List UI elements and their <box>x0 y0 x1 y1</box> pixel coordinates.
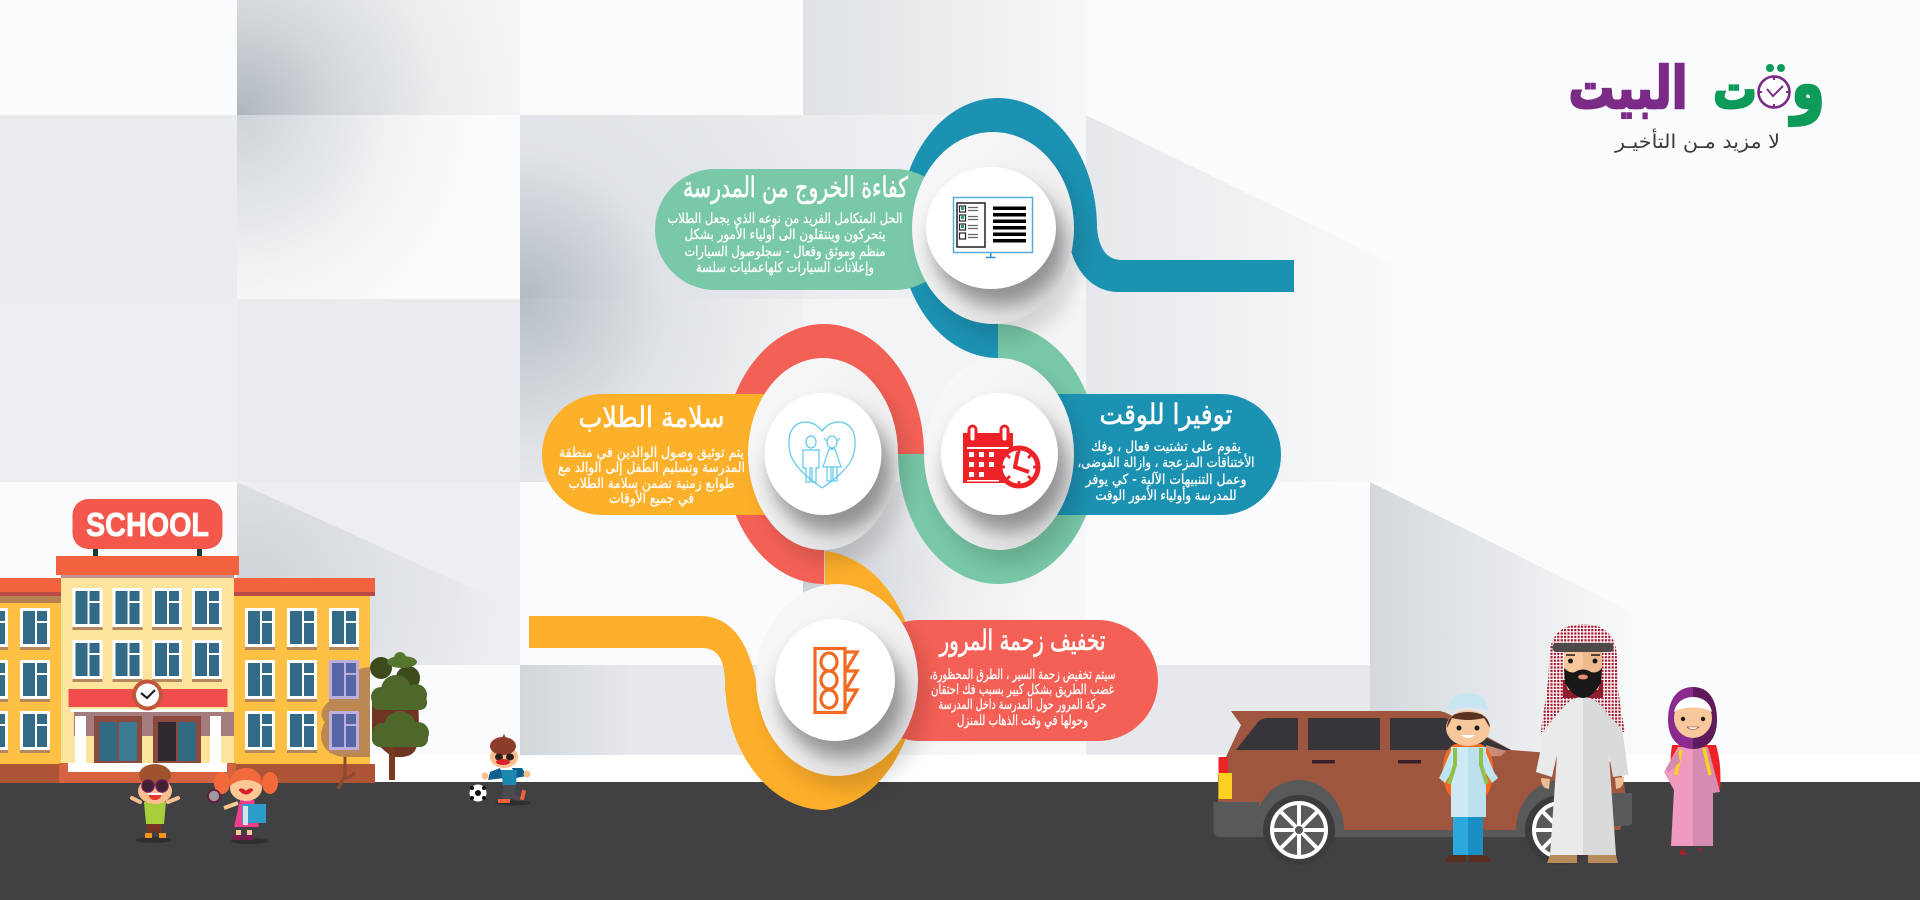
character: boy with ball <box>470 734 531 806</box>
disc: exit efficiency <box>912 132 1084 338</box>
school building <box>0 499 375 789</box>
character: boy with cap <box>1439 693 1498 862</box>
text block: وحولها في وقت الذهاب للمنزل <box>957 713 1088 729</box>
panel: exit efficiency <box>655 169 955 290</box>
heading: سلامة الطلاب <box>578 401 724 434</box>
text block: المدرسة وتسليم الطفل إلى الوالد مع <box>558 460 745 476</box>
disc: traffic reduction <box>756 584 928 790</box>
logo <box>1568 41 1825 153</box>
text block <box>668 211 902 276</box>
car trim <box>1214 780 1632 837</box>
character: girl in hijab <box>1664 687 1720 855</box>
character: man in thobe and ghutra <box>1536 624 1628 863</box>
text block: الأختناقات المزعجة ، وازالة الفوضى، <box>1078 453 1254 471</box>
text block: وعمل التنبيهات الآلية - كي يوفر <box>1085 472 1246 488</box>
ribbon: red ring <box>724 324 924 584</box>
clock <box>132 680 163 710</box>
panel: student safety <box>542 394 822 515</box>
school sign: SCHOOL <box>86 506 209 543</box>
car <box>1214 711 1632 865</box>
ghutra <box>1541 624 1625 732</box>
panel: saving time <box>1000 394 1281 515</box>
heading: تخفيف زحمة المرور <box>938 624 1106 657</box>
text block: حركة المرور حول المدرسة داخل المدرسة <box>938 697 1106 713</box>
ribbon: teal ring and tail <box>899 98 1294 358</box>
soccer ball <box>470 784 486 802</box>
ribbon: green ring <box>898 324 1098 584</box>
text block: غضب الطريق بشكل كبير بسبب فك احتقان <box>931 682 1114 698</box>
logo word: time <box>1713 41 1825 126</box>
character: boy with glasses <box>132 764 178 843</box>
heading: توفيرا للوقت <box>1100 398 1232 431</box>
text block: في جميع الأوقات <box>609 489 694 507</box>
text block: منظم وموثق وفعال - سجلوصول السيارات <box>684 244 886 260</box>
text block: سيتم تخفيض زحمة السير ، الطرق المحظورة، <box>930 667 1116 683</box>
character: girl with magnifier <box>208 768 278 844</box>
text block: للمدرسة وأولياء الأمور الوقت <box>1096 486 1236 504</box>
text block: الحل المتكامل الفريد من نوعه الذي يجعل الطلاب <box>668 211 902 227</box>
text block <box>1078 439 1254 504</box>
tree shadow on wall <box>321 667 370 757</box>
logo word: time: و <box>1789 41 1825 126</box>
windows <box>0 588 359 753</box>
logo word: time: ت <box>1713 58 1757 121</box>
logo clock <box>1758 76 1790 108</box>
road <box>0 782 1920 900</box>
text block: طوابع زمنية تضمن سلامة الطلاب <box>568 476 734 492</box>
disc: student safety <box>748 358 908 564</box>
text block: يتحركون وينتقلون الى أولياء الأمور بشكل <box>684 225 886 243</box>
icon: checklist on monitor <box>954 198 1032 258</box>
text block: يقوم على تشتيت فعال ، وفك <box>1091 439 1241 455</box>
logo word: home: البيت <box>1568 54 1688 122</box>
tree <box>370 652 429 780</box>
front wheel <box>1525 795 1597 865</box>
logo tagline: لا مزيد مـن التأخيـر <box>1614 128 1780 153</box>
text block: يتم توثيق وصول الوالدين في منطقة <box>559 445 744 461</box>
text block: وإعلانات السيارات كلهاعمليات سلسة <box>696 260 874 276</box>
school sign <box>72 499 222 557</box>
icon: traffic light <box>815 648 857 712</box>
icon: calendar with clock <box>963 426 1038 486</box>
rear wheel <box>1263 795 1335 865</box>
ribbon: yellow ring and tail <box>529 551 916 810</box>
entrance <box>68 689 234 763</box>
heading: كفاءة الخروج من المدرسة <box>683 171 908 205</box>
panel: traffic reduction <box>860 620 1158 741</box>
disc: saving time <box>924 358 1084 564</box>
thobe <box>1536 697 1583 855</box>
icon: heart with two children <box>789 422 855 488</box>
text block <box>558 445 745 507</box>
text block <box>930 667 1116 729</box>
car windows <box>1236 718 1511 750</box>
